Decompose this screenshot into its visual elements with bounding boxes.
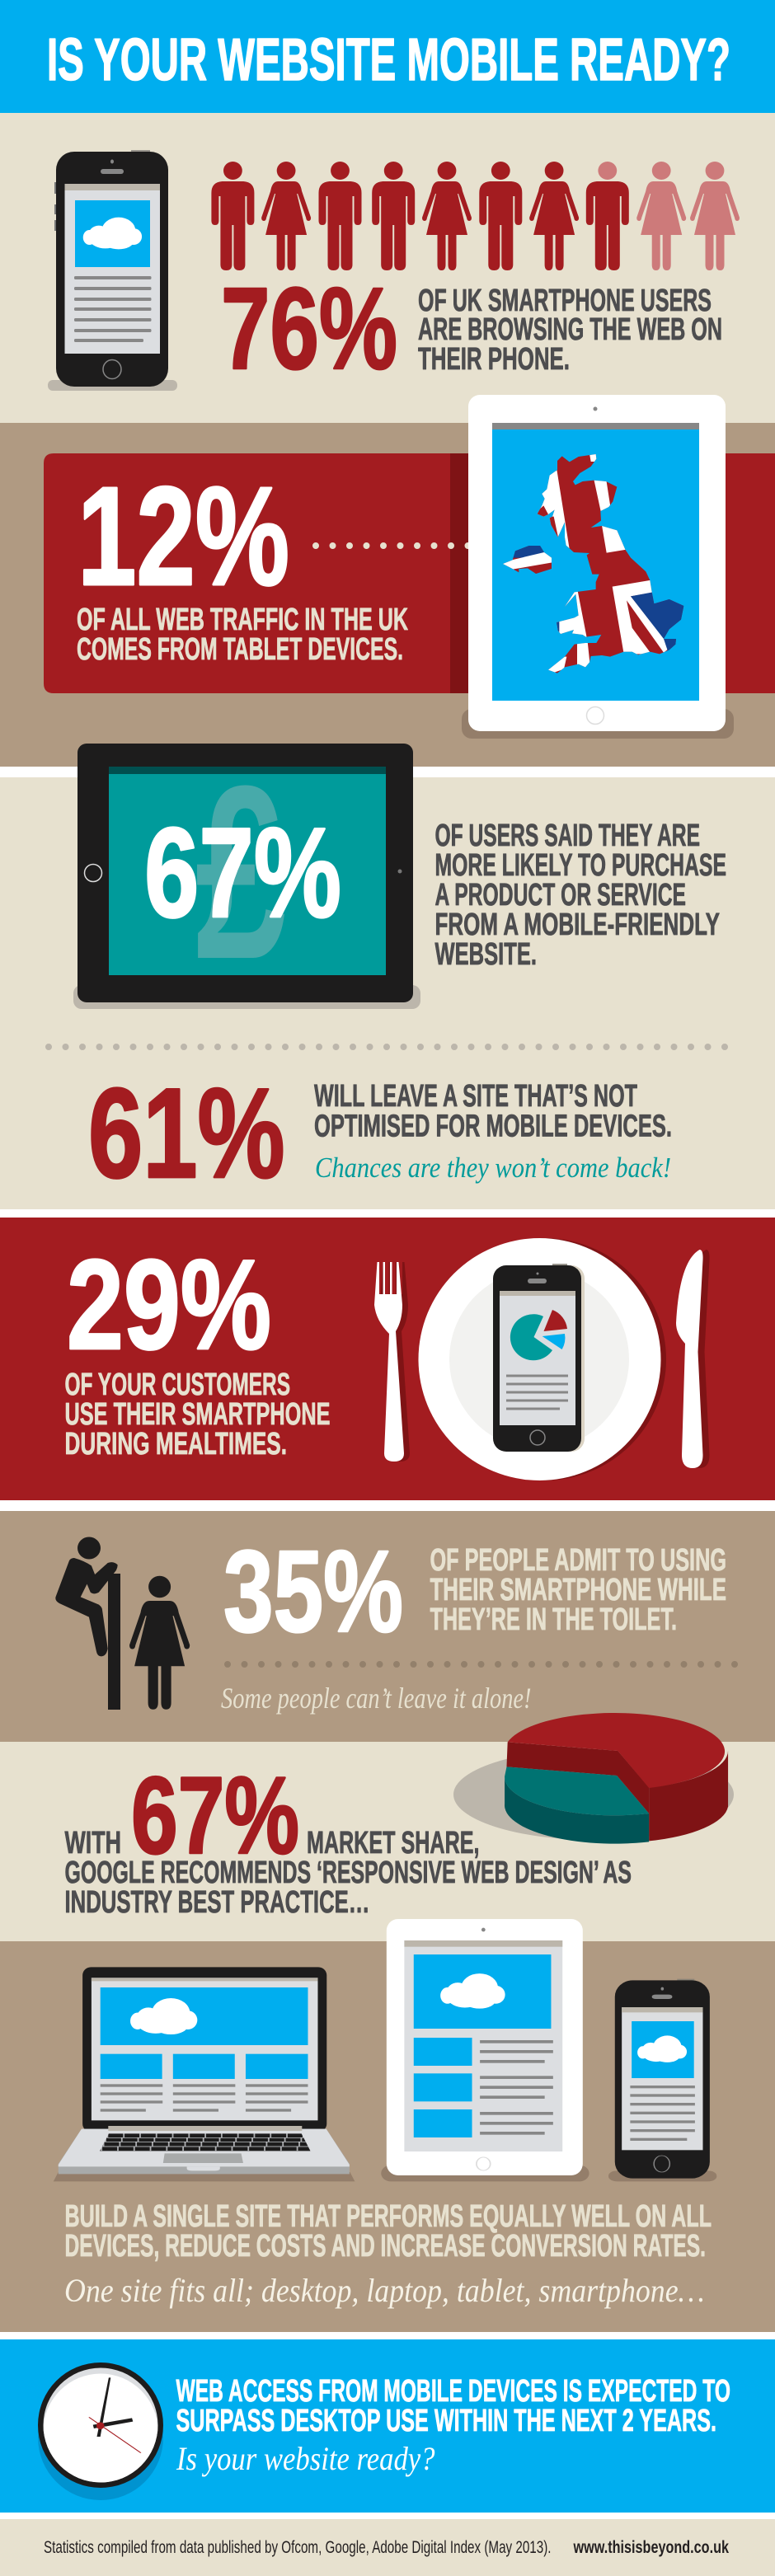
icon: UK map in flag colours [500, 451, 690, 678]
text: chances tagline: Chances are they won’t come back! [315, 1152, 671, 1184]
text: sources footer: Statistics compiled from data published by Ofcom, Google, Adobe Digital Index (May 2013). [44, 2538, 551, 2557]
icon: smartphone with cloud [48, 150, 177, 391]
text: market share statement: WITH [64, 1826, 121, 1860]
text: web access forecast [176, 2374, 730, 2438]
stat: 67% purchase: 67% [144, 801, 341, 944]
icon: pound sign: £ [195, 734, 286, 1011]
text: customers at mealtimes: OF YOUR CUSTOMERS [64, 1368, 290, 1402]
text: customers at mealtimes: DURING MEALTIMES. [64, 1427, 287, 1462]
text: UK smartphone users [418, 284, 722, 377]
stat: 35%: 35% [223, 1526, 403, 1656]
icon: plate [419, 1238, 666, 1480]
text: customers at mealtimes: USE THEIR SMARTPHONE [64, 1397, 330, 1432]
icon: phone with page layout [608, 1979, 716, 2181]
chart: pie on phone [510, 1310, 567, 1360]
icon: knife [676, 1250, 710, 1468]
panel: market share background [0, 1742, 775, 1941]
icon: phone on plate with pie chart [493, 1264, 585, 1452]
text: is your website ready: Is your website ready? [176, 2440, 435, 2477]
text: will leave site [314, 1079, 672, 1144]
panel: smartphone browsing background [0, 113, 775, 423]
text: one site fits all tagline: One site fits all; desktop, laptop, tablet, smartphone… [64, 2272, 704, 2309]
text: market share statement: INDUSTRY BEST PRACTICE… [64, 1885, 369, 1920]
text: build a single site [64, 2199, 712, 2264]
text: purchase likelihood: WEBSITE. [435, 937, 537, 972]
text: web traffic: OF ALL WEB TRAFFIC IN THE UK [77, 603, 408, 637]
icon: man and woman at toilet partition [55, 1537, 190, 1710]
icon: white tablet with page layout [381, 1919, 589, 2181]
text: website url: www.thisisbeyond.co.uk [573, 2538, 729, 2557]
panel: toilet background [0, 1511, 775, 1742]
text: UK smartphone users: THEIR PHONE. [418, 342, 570, 377]
icon: black landscape tablet [73, 734, 420, 1011]
stat: 67% market share: 67% [131, 1755, 299, 1877]
stat: 29%: 29% [67, 1233, 271, 1376]
text: customers at mealtimes [64, 1368, 330, 1462]
text: smartphone in toilet [430, 1543, 726, 1637]
stat: 12%: 12% [78, 458, 289, 615]
text: purchase likelihood [435, 819, 726, 972]
panel: footer background [0, 2519, 775, 2576]
text: web traffic: COMES FROM TABLET DEVICES. [77, 632, 403, 667]
panel: purchase background [0, 777, 775, 1209]
panel: responsive design background [0, 1941, 775, 2332]
text: market share statement: MARKET SHARE, [307, 1826, 480, 1860]
panel: red tablet traffic banner [44, 453, 775, 693]
text: leave it alone tagline: Some people can’t leave it alone! [221, 1682, 531, 1715]
icon: clock [38, 2363, 163, 2500]
icon: fork [374, 1262, 410, 1462]
panel: mealtimes background [0, 1218, 775, 1500]
icon: white tablet with UK flag map [462, 395, 734, 739]
text: web traffic [77, 603, 408, 667]
icon: row of ten people [211, 162, 740, 270]
panel: header [0, 0, 775, 113]
chart: 3D market share pie [453, 1713, 734, 1844]
stat: 76%: 76% [221, 263, 397, 393]
panel: closing background [0, 2339, 775, 2513]
stat: 61%: 61% [88, 1062, 285, 1204]
icon: laptop [54, 1967, 355, 2181]
text: market share statement [64, 1755, 632, 1920]
panel: tablet traffic background [0, 423, 775, 767]
